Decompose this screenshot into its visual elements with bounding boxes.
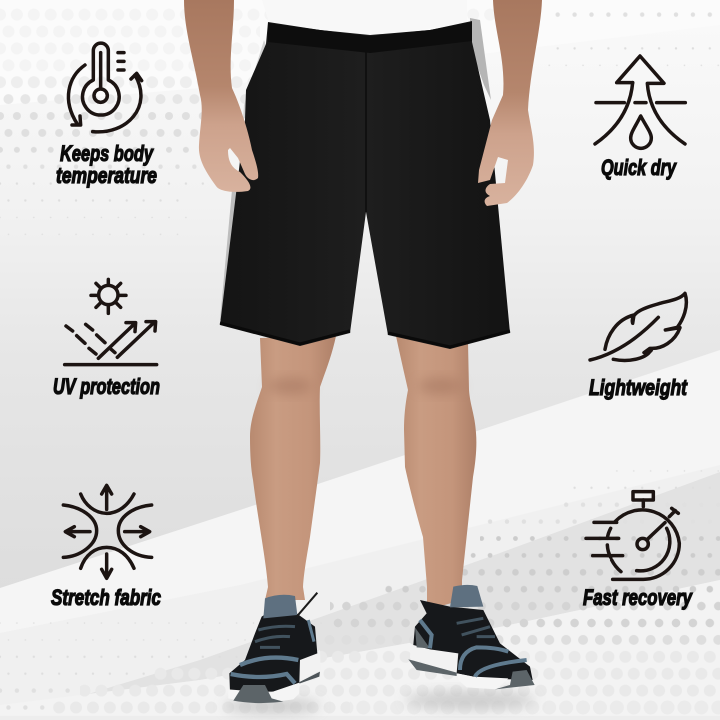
white t-shirt (262, 0, 467, 36)
feature: stretch fabric (51, 485, 161, 610)
label: Quick dry (601, 155, 677, 180)
right shoe (408, 585, 535, 689)
legs (250, 336, 476, 610)
left shoe (228, 593, 321, 703)
feature: UV protection (53, 279, 160, 399)
feature: keeps body temperature (56, 43, 157, 188)
icon: four-way stretch arrows (63, 485, 152, 578)
person wearing shorts (184, 0, 542, 703)
icon: arrow through surface with droplet (595, 56, 685, 148)
top-right halftone (545, 6, 720, 23)
icon: stopwatch with speed lines (586, 492, 679, 579)
top-left halftone (0, 6, 540, 23)
black shorts (220, 18, 510, 349)
feature: lightweight (589, 293, 688, 400)
icon: sun with reflected rays (65, 279, 157, 365)
lower halftone rows (610, 462, 720, 479)
label: Stretch fabric (51, 585, 161, 610)
label: UV protection (53, 374, 160, 399)
icon: thermometer with circular arrows (68, 43, 142, 132)
feature: quick dry (595, 56, 685, 180)
arms and hands (184, 0, 542, 206)
label: temperature (56, 163, 157, 188)
feature: fast recovery (583, 492, 693, 610)
label: Keeps body (60, 141, 154, 166)
label: Lightweight (589, 375, 688, 400)
icon: feather (590, 293, 686, 360)
floor shadows (224, 698, 320, 714)
